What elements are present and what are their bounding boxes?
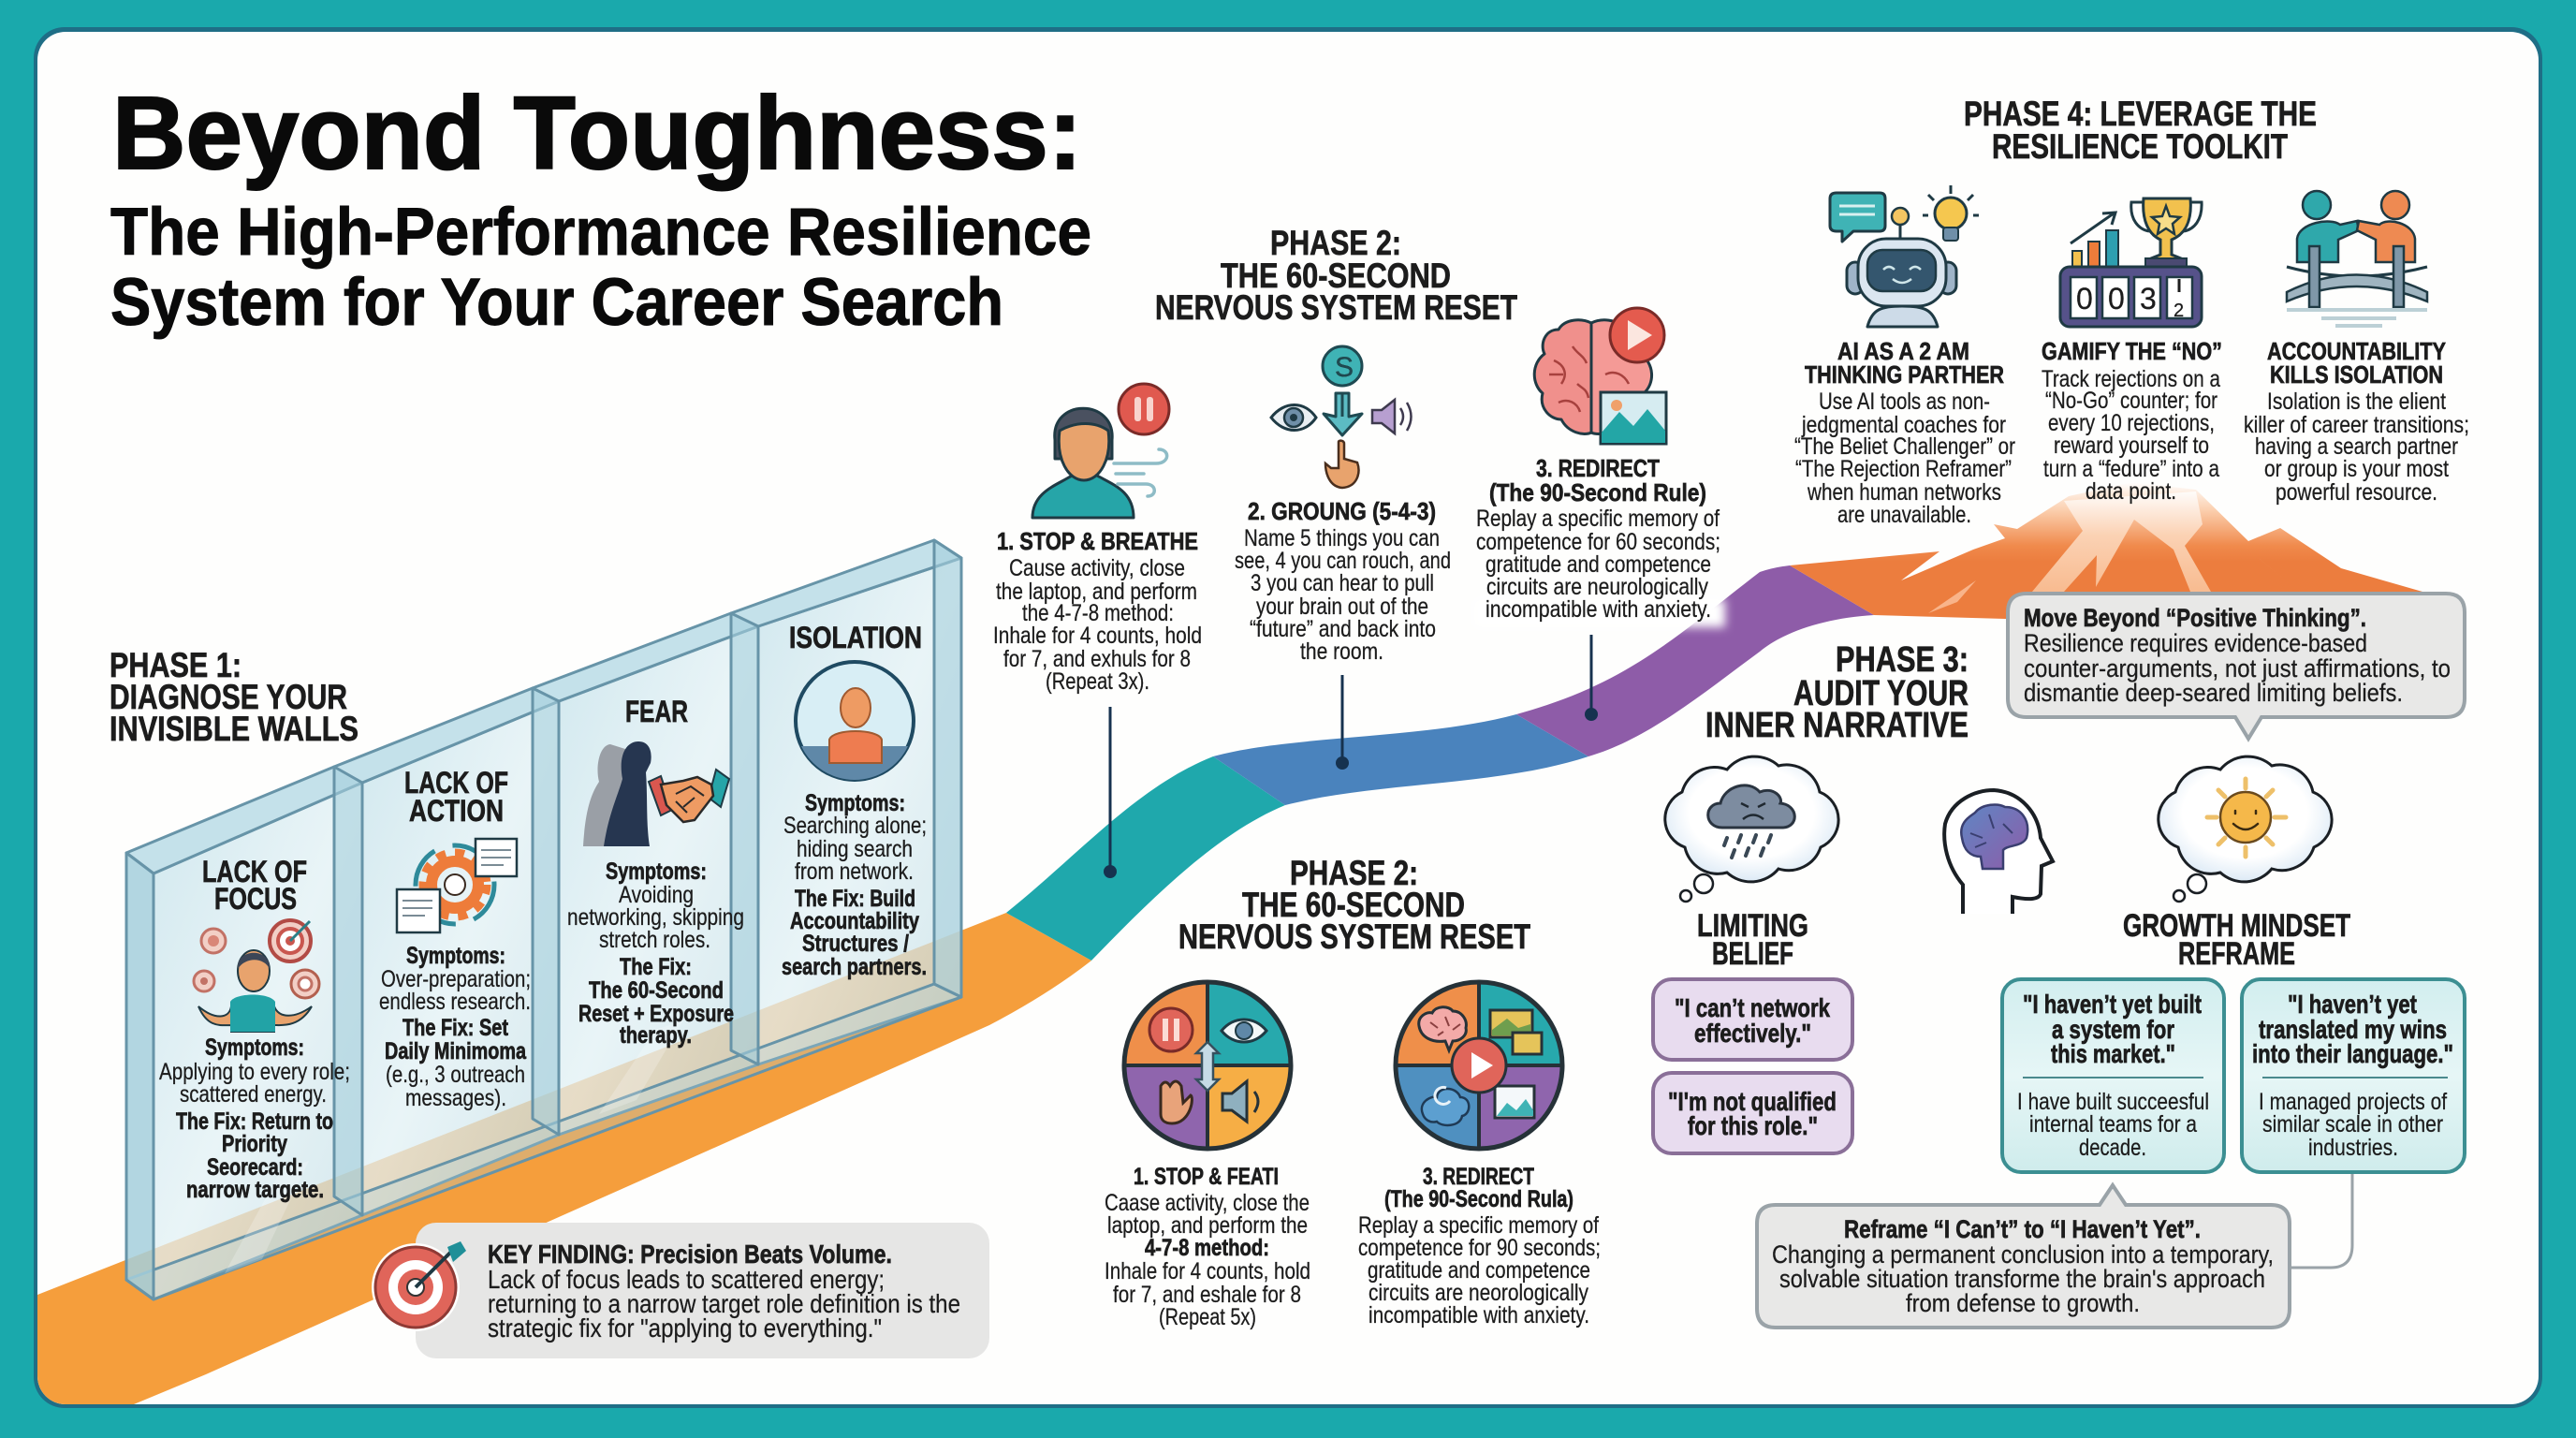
tool: gamify the no: every 10 rejections, [2048,410,2215,436]
wall: isolation: Searching alone; [783,813,927,839]
wall: fear: Reset + Exposure [578,1001,734,1027]
callout: reframe can't to haven't yet: Changing a permanent conclusion into a temporary, [1772,1240,2274,1269]
step: stop and breathe: (Repeat 3x). [1046,668,1149,695]
phase 3 heading: INNER NARRATIVE [1705,706,1969,745]
callout: reframe can't to haven't yet [1757,1185,2290,1328]
tool: accountability [2244,191,2469,506]
step: ground: 3 you can hear to pull [1251,570,1434,596]
step: redirect: (The 90-Second Rule) [1489,478,1706,506]
wall: fear: The 60-Second [589,977,724,1004]
reset wheel: redirect: incompatible with anxiety. [1368,1302,1589,1328]
callout: key finding: Lack of focus leads to scattered energy; [488,1265,885,1294]
tool: accountability: powerful resource. [2276,479,2437,506]
tool: AI thinking partner: when human networks [1807,479,2001,506]
phase 1 heading [110,646,359,748]
phase 4 heading: PHASE 4: LEVERAGE THE [1964,95,2317,133]
tool: gamify the no: “No-Go” counter; for [2045,388,2217,414]
wall: lack of action [379,766,531,1111]
card: translated wins: similar scale in other [2262,1111,2443,1137]
tool: gamify the no: reward yourself to [2054,433,2209,459]
icon: counter with trophy: 0 [2076,282,2093,315]
icon: anxious silhouette and handshake [583,741,729,846]
callout: key finding [372,1223,989,1358]
card: can't network [1653,979,1852,1060]
phase 2 heading (lower) [1178,854,1530,956]
card: translated wins: "I haven’t yet [2288,990,2417,1019]
wall: lack of action: Over-preparation; [381,966,531,992]
tool: accountability: KILLS ISOLATION [2270,360,2443,389]
white halo over the road [1474,599,1725,627]
step: redirect: gratitude and competence [1486,551,1711,578]
wall: lack of focus: FOCUS [214,882,297,916]
wall: fear: Avoiding [619,882,694,908]
step: ground: 2. GROUNG (5-4-3) [1248,497,1436,525]
card: built a system [2002,979,2224,1172]
tool: AI thinking partner: AI AS A 2 AM [1837,337,1969,365]
wall: fear: therapy. [620,1022,692,1049]
card: not qualified: for this role." [1688,1111,1818,1140]
icon: counter with trophy: 3 [2140,282,2157,315]
wall: lack of action: LACK OF [404,766,508,800]
phase 2 heading (top): NERVOUS SYSTEM RESET [1155,288,1517,327]
tool: gamify the no: data point. [2086,478,2176,505]
card: built a system: a system for [2052,1015,2174,1044]
step: ground: “future” and back into [1250,616,1436,642]
icon: counter with trophy: 2 [2174,301,2184,321]
wall: isolation: Accountability [790,908,919,934]
card: translated wins: I managed projects of [2259,1089,2447,1115]
phase 3 heading [1705,640,1969,745]
card: translated wins [2242,979,2465,1172]
column: growth mindset reframe: REFRAME [2178,936,2295,972]
callout: move beyond positive thinking: dismantie deep-seared limiting beliefs. [2024,679,2403,707]
step: redirect: Replay a specific memory of [1476,506,1720,532]
card: built a system: this market." [2051,1039,2175,1068]
wall: lack of focus: scattered energy. [180,1081,327,1108]
wall: fear: stretch roles. [599,927,710,953]
callout: key finding: strategic fix for "applying to everything." [488,1313,882,1343]
icon: four-quadrant wheel [1124,982,1291,1149]
wall: lack of action: Symptoms: [406,943,505,969]
card: can't network: effectively." [1694,1019,1811,1048]
wall: lack of focus: Seorecard: [207,1154,303,1181]
tool: accountability: killer of career transitions; [2244,412,2469,438]
card: built a system: I have built succeesful [2017,1089,2209,1115]
wall: lack of focus: narrow targete. [186,1177,324,1203]
wall: fear: FEAR [625,695,688,728]
reset wheel: redirect: competence for 90 seconds; [1358,1235,1601,1261]
reset wheel: redirect [1358,982,1601,1328]
marker stem [1104,707,1117,878]
icon: senses with arrow [1271,346,1412,488]
marker stem [1585,635,1598,721]
tool: AI thinking partner: are unavailable. [1837,502,1971,528]
marker stem [1336,675,1349,770]
tool: accountability: Isolation is the elient [2267,389,2446,415]
step: ground: Name 5 things you can [1244,525,1440,551]
wall: lack of action: messages). [405,1085,506,1111]
tool: accountability: ACCOUNTABILITY [2267,337,2446,365]
wall: lack of action: ACTION [409,794,504,828]
tool: accountability: or group is your most [2264,456,2449,482]
icon: sun thought cloud [2159,756,2332,902]
step: stop and breathe: the laptop, and perform [996,579,1197,605]
reset wheel: redirect: 3. REDIRECT [1423,1164,1534,1190]
phase 2 heading (lower): THE 60-SECOND [1242,886,1465,924]
icon: counter with trophy: 0 [2108,282,2125,315]
card: translated wins: translated my wins [2259,1015,2447,1044]
tool: AI thinking partner: “The Rejection Reframer” [1795,456,2012,482]
tool: AI thinking partner: jedgmental coaches for [1801,412,2006,438]
wall: fear: Symptoms: [606,858,707,885]
wall: lack of focus: Priority [222,1131,287,1157]
callout: key finding: returning to a narrow target role definition is the [488,1289,960,1318]
tool: gamify the no: turn a “fedure” into a [2043,456,2219,482]
phase 1 heading: DIAGNOSE YOUR [110,678,347,716]
card: built a system: "I haven’t yet built [2023,990,2202,1019]
wall: isolation: hiding search [797,836,913,862]
wall: isolation: ISOLATION [789,621,922,654]
callout: reframe can't to haven't yet: solvable situation transforme the brain's approach [1779,1265,2265,1293]
title [110,76,1091,340]
step: ground: the room. [1300,638,1383,665]
card: translated wins: into their language." [2252,1039,2453,1068]
callout: reframe can't to haven't yet: Reframe “I Can’t” to “I Haven’t Yet”. [1844,1215,2201,1243]
callout: move beyond positive thinking: Move Beyond “Positive Thinking”. [2024,604,2366,632]
career path road [28,565,1874,1408]
step: redirect [1474,308,1725,721]
step: ground: see, 4 you can rouch, and [1235,548,1451,574]
card: can't network: "I can’t network [1675,993,1830,1022]
card: not qualified [1653,1073,1852,1153]
card: built a system: internal teams for a [2029,1111,2197,1137]
card: translated wins: industries. [2308,1135,2398,1161]
phase 2 heading (top) [1155,224,1517,327]
column: limiting belief [1653,756,1852,1153]
title: The High-Performance Resilience [110,196,1091,270]
reset wheel: redirect: circuits are neorologically [1368,1280,1588,1306]
phase 2 heading (top): THE 60-SECOND [1221,257,1451,295]
tool: gamify the no: Track rejections on a [2042,366,2220,392]
wall: isolation [782,621,927,980]
icon: brain with play button and picture [1534,308,1666,444]
tool: AI thinking partner: Use AI tools as non- [1819,389,1990,415]
step: redirect: competence for 60 seconds; [1476,529,1720,555]
reset wheel: redirect: Replay a specific memory of [1358,1212,1599,1239]
wall: lack of focus: LACK OF [202,855,307,888]
callout: key finding: KEY FINDING: Precision Beats Volume. [488,1240,892,1269]
step: stop and breathe: Cause activity, close [1009,555,1185,581]
icon: gear and documents [397,839,517,932]
callout: reframe can't to haven't yet: from defense to growth. [1906,1289,2140,1317]
icon: counter with trophy [2060,198,2202,327]
tool: gamify the no: GAMIFY THE “NO” [2042,337,2222,365]
callout: move beyond positive thinking [2008,594,2465,739]
reset wheel: stop and breathe: for 7, and eshale for 8 [1113,1282,1301,1308]
wall: lack of focus [159,855,350,1203]
icon: person in a bubble [796,662,914,780]
wall: isolation: from network. [795,858,914,885]
step: ground: your brain out of the [1256,594,1428,620]
tool: AI thinking partner [1794,185,2015,528]
reset wheel: stop and breathe: 1. STOP & FEATI [1134,1164,1279,1190]
reset wheel: redirect: (The 90-Second Rula) [1384,1186,1573,1212]
phase 2 heading (top): PHASE 2: [1270,224,1401,262]
panel: glass walls [126,540,961,1299]
tool: accountability: having a search partner [2255,433,2458,460]
reset wheel: stop and breathe: Inhale for 4 counts, hold [1105,1258,1310,1284]
wall: fear: The Fix: [620,954,692,980]
wall: lack of focus: The Fix: Return to [176,1108,333,1135]
icon: robot with speech bubble and bulb [1830,185,1979,327]
step: stop and breathe [993,384,1202,878]
column: growth mindset reframe: GROWTH MINDSET [2123,908,2350,944]
icon: head with brain [1944,790,2053,914]
reset wheel: stop and breathe: 4-7-8 method: [1145,1235,1269,1261]
step: redirect: circuits are neurologically [1486,574,1708,600]
connector line [2290,1172,2352,1268]
wall: fear [567,695,744,1049]
callout: move beyond positive thinking: Resilience requires evidence-based [2024,629,2367,657]
icon: senses with arrow: S [1335,352,1354,383]
icon: target [372,1241,466,1331]
phase 3 heading: AUDIT YOUR [1793,674,1969,713]
wall: lack of action: Daily Minimoma [385,1038,527,1064]
icon: breathing person with pause [1032,384,1169,518]
step: redirect: incompatible with anxiety. [1486,596,1711,623]
tool: AI thinking partner: “The Beliet Challenger” or [1794,433,2015,460]
reset wheel: redirect: gratitude and competence [1368,1257,1590,1284]
phase 2 heading (lower): PHASE 2: [1290,854,1418,892]
reset wheel: stop and breathe: laptop, and perform the [1107,1212,1308,1239]
tool: gamify the no [2042,198,2222,505]
step: ground [1235,346,1451,770]
phase 2 heading (lower): NERVOUS SYSTEM RESET [1178,917,1530,956]
wall: lack of action: (e.g., 3 outreach [386,1062,525,1088]
wall: isolation: Structures / [802,931,909,957]
step: stop and breathe: Inhale for 4 counts, hold [993,623,1202,649]
phase 3 heading: PHASE 3: [1836,640,1969,680]
wall: lack of focus: Symptoms: [205,1034,304,1061]
wall: fear: networking, skipping [567,904,744,931]
card: built a system: decade. [2079,1135,2146,1161]
title: Beyond Toughness: [112,76,1082,191]
phase 1 heading: INVISIBLE WALLS [110,710,359,748]
phase 4 heading [1964,95,2317,166]
wall: lack of action: endless research. [379,989,531,1015]
title: System for Your Career Search [110,266,1003,340]
glass structure [126,540,961,1299]
icon: storm thought cloud [1665,756,1838,902]
step: redirect: 3. REDIRECT [1536,454,1660,482]
column: limiting belief: BELIEF [1712,936,1793,972]
wall: lack of action: The Fix: Set [402,1015,509,1041]
mountain peak [1790,482,2422,619]
wall: isolation: search partners. [782,954,927,980]
reset wheel: stop and breathe: Caase activity, close the [1105,1190,1310,1216]
step: stop and breathe: the 4-7-8 method: [1022,600,1174,626]
step: stop and breathe: 1. STOP & BREATHE [997,527,1198,555]
reset wheel: stop and breathe: (Repeat 5x) [1159,1304,1256,1330]
step: stop and breathe: for 7, and exhuls for 8 [1003,646,1191,672]
reset wheel: stop and breathe [1105,982,1310,1330]
wall: isolation: Symptoms: [805,790,905,816]
column: limiting belief: LIMITING [1697,908,1808,944]
column: growth mindset reframe [2002,756,2465,1268]
phase 4 heading: RESILIENCE TOOLKIT [1992,127,2288,166]
wall: isolation: The Fix: Build [795,886,915,912]
card: not qualified: "I'm not qualified [1668,1087,1837,1116]
icon: person with scattered targets [194,920,319,1032]
callout: move beyond positive thinking: counter-arguments, not just affirmations, to [2024,654,2451,682]
wall: lack of focus: Applying to every role; [159,1059,350,1085]
icon: four-quadrant wheel with play button [1396,982,1562,1149]
icon: two people on bridge [2287,191,2427,326]
tool: AI thinking partner: THINKING PARTHER [1805,360,2004,389]
phase 1 heading: PHASE 1: [110,646,242,684]
